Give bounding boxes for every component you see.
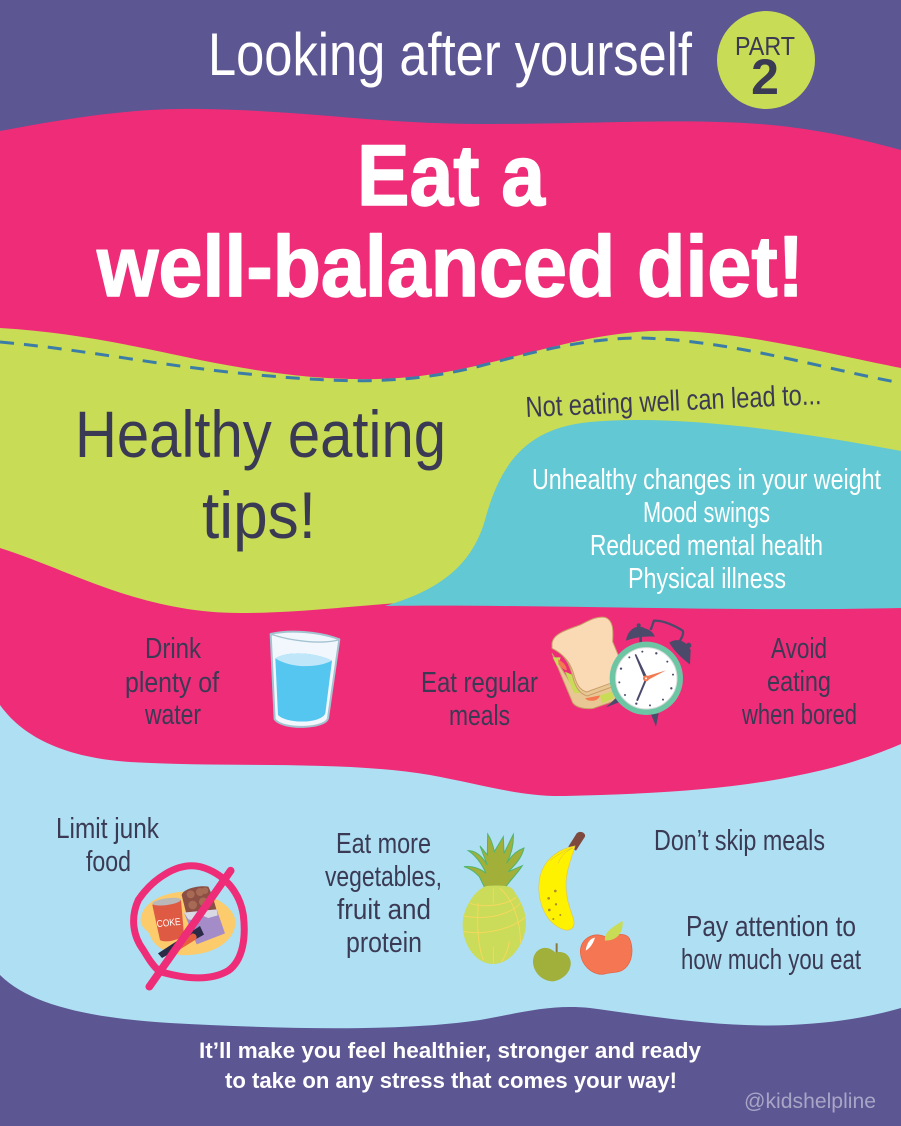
dashed line — [0, 338, 901, 383]
prohibition sign — [134, 866, 244, 978]
tip: drink water — [125, 633, 220, 731]
tip: eat more vegetables, fruit and protein — [325, 828, 442, 959]
pineapple — [463, 834, 526, 964]
tip: eat regular meals — [421, 667, 538, 732]
clock ticks — [618, 651, 674, 706]
chocolate bar — [182, 886, 217, 922]
clock face — [610, 642, 683, 715]
banana — [539, 832, 585, 930]
tip: pay attention — [681, 911, 861, 976]
main heading: Eat a — [357, 128, 546, 224]
tip: eat regular meals: meals — [449, 700, 510, 732]
candy bar — [158, 926, 204, 958]
part 2 badge: PART — [735, 31, 795, 61]
pink lower band — [0, 548, 901, 800]
consequences list: Mood swings — [643, 497, 770, 529]
tip: drink water: Drink — [145, 633, 201, 665]
tip: eat more vegetables, fruit and protein: Eat more — [336, 828, 431, 860]
tip: eat more vegetables, fruit and protein: protein — [346, 927, 422, 959]
green band — [0, 328, 901, 620]
subheading: healthy eating tips: Healthy eating — [75, 397, 446, 471]
icon: sandwich and alarm clock — [552, 617, 691, 727]
light blue band — [0, 705, 901, 1040]
tip: eat more vegetables, fruit and protein: fruit and — [337, 894, 431, 926]
subheading: healthy eating tips: tips! — [202, 478, 316, 552]
main heading: well-balanced diet! — [96, 219, 804, 315]
tip: limit junk food: food — [86, 846, 131, 878]
tip: avoid eating when bored: Avoid — [771, 633, 827, 665]
clock hands — [636, 655, 646, 679]
icon: glass of water — [271, 632, 339, 727]
clock feet — [606, 697, 659, 727]
tip: drink water: water — [144, 699, 201, 731]
pink upper band — [0, 109, 901, 400]
footer message: It’ll make you feel healthier, stronger and ready — [199, 1038, 702, 1063]
tip: limit junk food: Limit junk — [56, 813, 159, 845]
part 2 badge: 2 — [751, 49, 779, 105]
red apple — [580, 921, 632, 974]
tip: limit junk food — [56, 813, 159, 878]
icon: crossed out junk food: COKE — [156, 917, 182, 930]
green apple — [533, 943, 571, 981]
tip: eat regular meals: Eat regular — [421, 667, 538, 699]
clock bells — [626, 627, 655, 641]
tip: avoid eating when bored — [741, 633, 857, 731]
tip: avoid eating when bored: when bored — [741, 699, 857, 731]
main heading — [96, 128, 804, 315]
tip: avoid eating when bored: eating — [767, 666, 831, 698]
sandwich — [552, 617, 622, 709]
social handle: @kidshelpline — [744, 1090, 876, 1113]
header title: Looking after yourself — [208, 21, 692, 88]
coke can — [152, 899, 184, 941]
footer message: to take on any stress that comes your way! — [225, 1068, 677, 1093]
footer message — [199, 1038, 702, 1093]
consequences list — [532, 464, 881, 595]
icon: crossed out junk food — [134, 866, 244, 987]
tip: eat more vegetables, fruit and protein: vegetables, — [325, 861, 442, 893]
purple footer band — [0, 975, 901, 1126]
tip: pay attention: Pay attention to — [686, 911, 856, 943]
not eating well caption: Not eating well can lead to... — [525, 379, 822, 424]
consequences list: Physical illness — [628, 563, 786, 595]
icon: fruit — [463, 832, 632, 981]
teal panel — [385, 420, 901, 609]
tip: don't skip meals: Don’t skip meals — [654, 825, 825, 857]
subheading: healthy eating tips — [75, 397, 446, 552]
part 2 badge — [717, 11, 815, 109]
tip: drink water: plenty of — [125, 667, 220, 699]
consequences list: Reduced mental health — [590, 530, 823, 562]
